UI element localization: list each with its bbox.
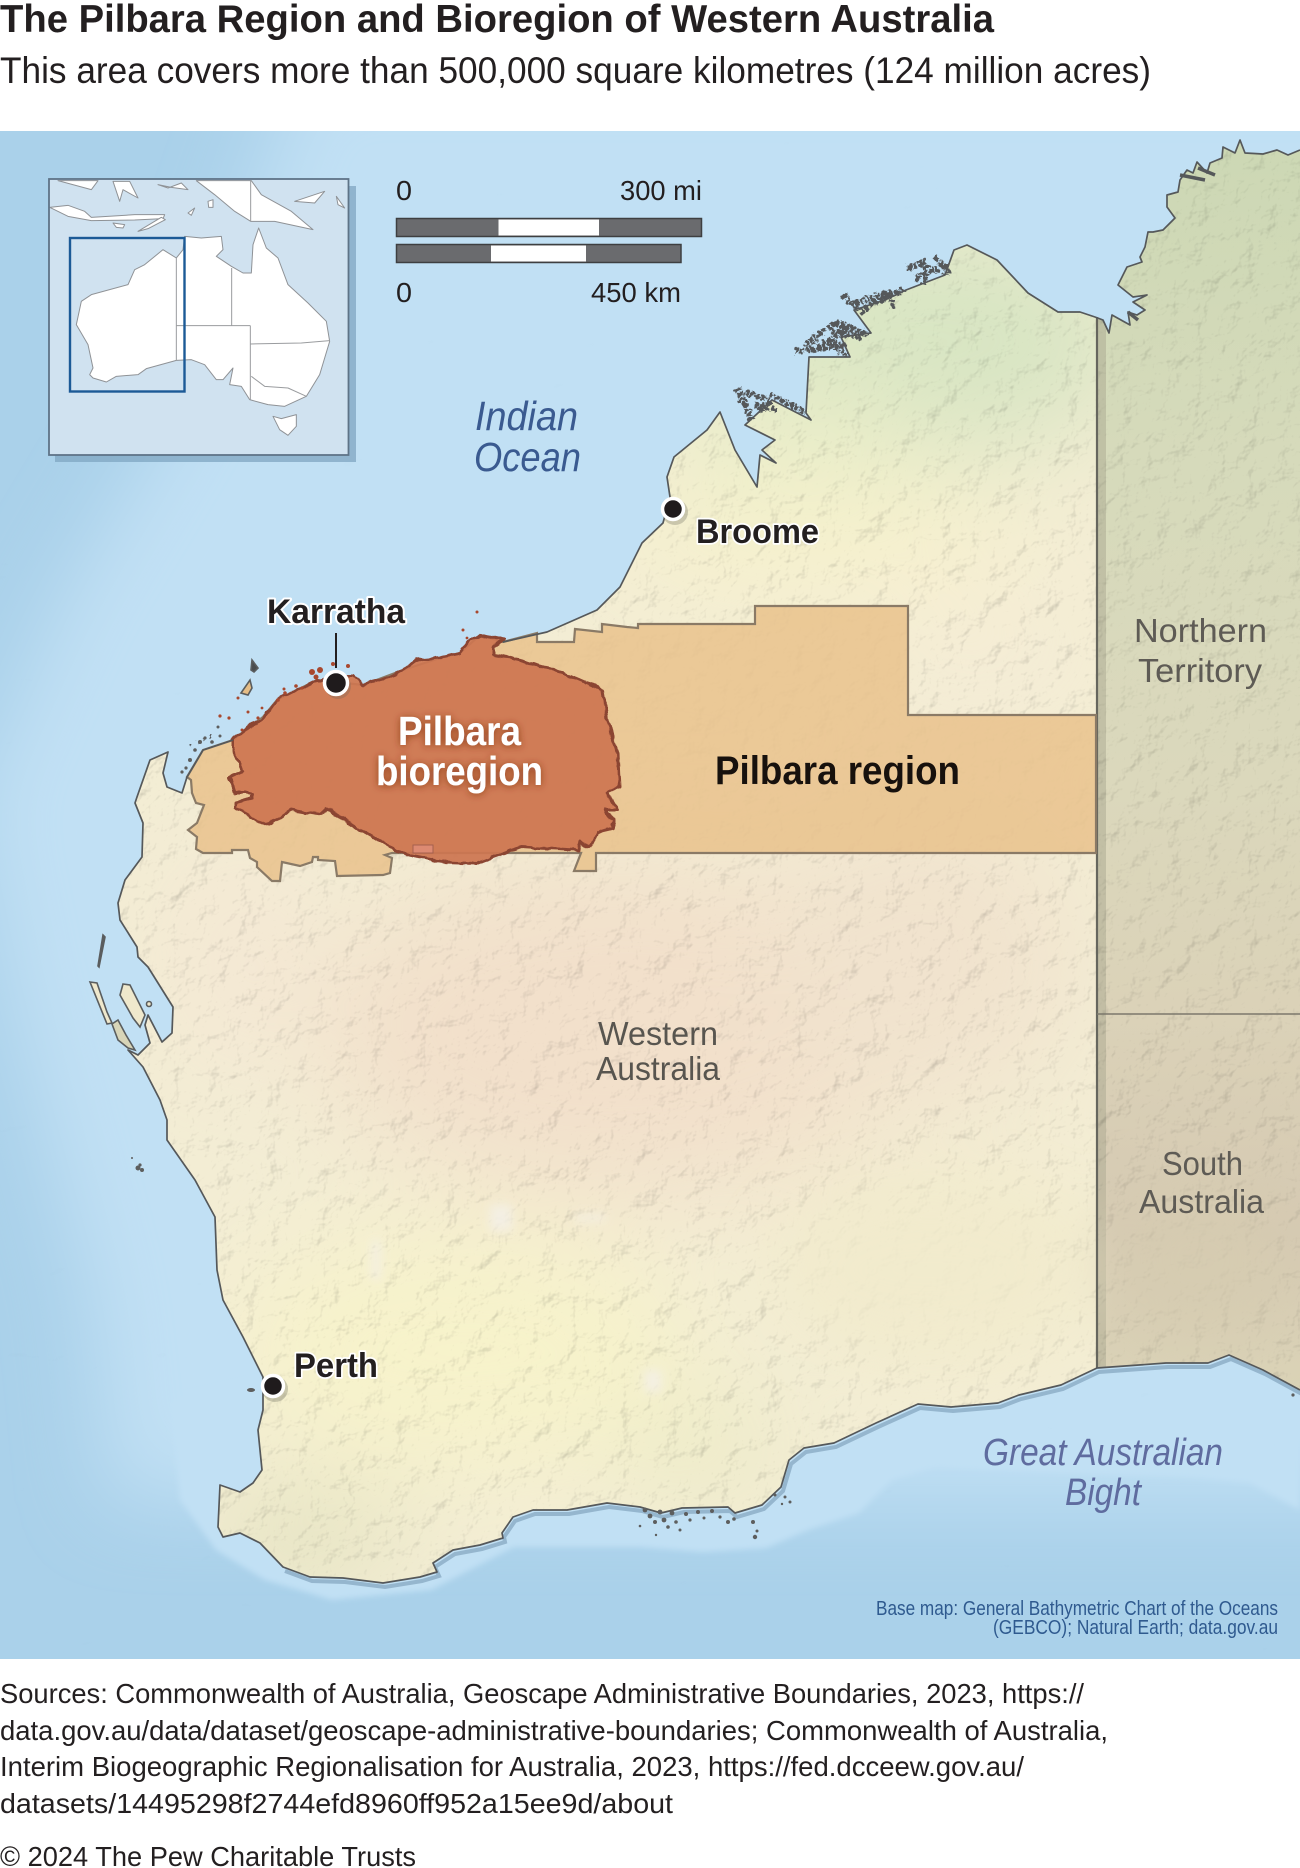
label: Western Australia: Australia [596, 1050, 721, 1087]
Kimberley mangrove fringe [190, 258, 948, 745]
label: Pilbara bioregion [376, 708, 543, 794]
inset locator map [49, 179, 356, 462]
marker: Perth: Perth [294, 1347, 378, 1385]
label: Indian Ocean [476, 400, 580, 472]
Pilbara region [187, 606, 1096, 881]
sources note: Interim Biogeographic Regionalisation for Australia, 2023, https://fed.dcceew.gov.au/ [0, 1751, 1024, 1782]
marker: Broome: Broome [696, 513, 819, 551]
scale bar [396, 175, 702, 308]
sources note: datasets/14495298f2744efd8960ff952a15ee9d/about [0, 1788, 673, 1819]
label: Indian Ocean: Ocean [474, 434, 581, 480]
scale bar: 0 [396, 277, 412, 308]
islands: Recherche Archipelago [131, 726, 1295, 1539]
land: Australia [118, 142, 1300, 1582]
state borders [1097, 317, 1300, 1368]
islands: Dampier red specks [218, 610, 478, 732]
label: Pilbara bioregion: bioregion [376, 748, 543, 794]
label: South Australia: South [1162, 1145, 1243, 1182]
sources note [0, 1678, 1108, 1819]
marker: Karratha [267, 593, 406, 699]
label: Indian Ocean: Indian [475, 393, 578, 439]
islands: Shark Bay and offshore [90, 660, 258, 1050]
label: Western Australia [596, 1022, 720, 1080]
label: Great Australian Bight: Great Australian [983, 1432, 1223, 1474]
label: Great Australian Bight [983, 1432, 1223, 1514]
scale bar: 300 mi [620, 175, 702, 206]
sources note: data.gov.au/data/dataset/geoscape-administrative-boundaries; Commonwealth of Australia, [0, 1715, 1108, 1746]
marker: Perth [262, 1347, 378, 1402]
scale bar: 450 km [591, 277, 681, 308]
sources note: Sources: Commonwealth of Australia, Geoscape Administrative Boundaries, 2023, https:// [0, 1678, 1084, 1709]
label: Western Australia: Western [598, 1015, 718, 1052]
marker: Karratha: Karratha [267, 593, 406, 631]
label: South Australia [1139, 1151, 1264, 1214]
marker: Broome [662, 498, 819, 551]
coastline [118, 140, 1300, 1583]
label: South Australia: Australia [1139, 1183, 1265, 1220]
Australia outline [76, 228, 330, 406]
subtitle: This area covers more than 500,000 square kilometres (124 million acres) [0, 50, 1151, 91]
scale bar: 0 [396, 175, 412, 206]
base map credit [876, 1598, 1278, 1639]
label: Great Australian Bight: Bight [1065, 1472, 1142, 1514]
Pilbara bioregion [230, 635, 620, 863]
terrain texture [120, 152, 1300, 1580]
label: Pilbara region: Pilbara region [715, 749, 960, 793]
label: Pilbara bioregion: Pilbara [398, 708, 522, 754]
label: Northern Territory [1136, 618, 1265, 689]
label: Northern Territory: Territory [1138, 652, 1263, 689]
label: Northern Territory: Northern [1134, 612, 1267, 649]
coast shadow [285, 1359, 1300, 1587]
